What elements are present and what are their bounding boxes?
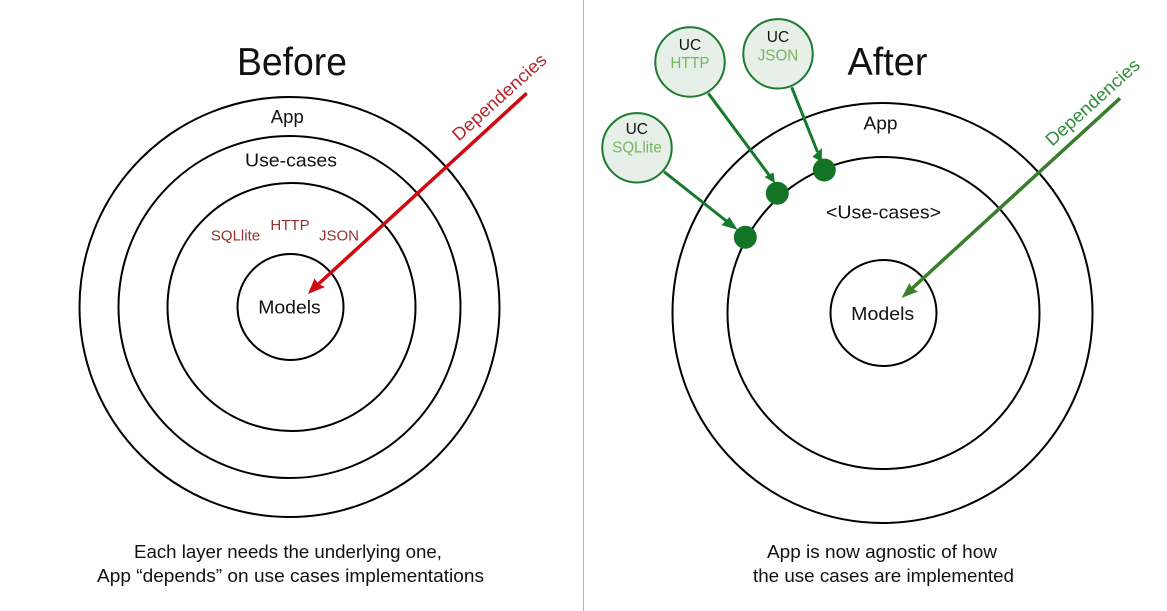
caption: after: the use cases are implemented — [753, 565, 1014, 586]
label: dependencies: Dependencies — [1041, 55, 1144, 150]
node: UC SQLlite: UC — [626, 121, 648, 138]
label: HTTP: HTTP — [270, 217, 310, 234]
node: UC JSON — [743, 19, 813, 88]
label: dependencies: Dependencies — [448, 50, 551, 145]
arrow: dependencies — [902, 98, 1120, 298]
node: UC HTTP — [655, 27, 725, 97]
port: SQLlite — [734, 226, 757, 249]
panel: after — [602, 19, 1144, 586]
heading: before: Before — [237, 41, 347, 84]
arrow: SQLlite to port — [664, 172, 738, 230]
caption: before: Each layer needs the underlying one, — [134, 541, 442, 562]
label: JSON: JSON — [319, 228, 359, 245]
node: UC HTTP: UC — [679, 37, 701, 54]
label: App: App — [271, 106, 304, 127]
label: Models: Models — [851, 303, 914, 324]
caption: before: App “depends” on use cases implementations — [97, 565, 484, 586]
arrow: HTTP to port — [708, 93, 775, 183]
diagram: after circles — [672, 103, 1092, 523]
diagram: before circles — [80, 97, 500, 517]
heading: after: After — [848, 41, 928, 84]
caption: before — [97, 541, 484, 586]
port: JSON — [813, 158, 836, 182]
node: UC SQLlite — [602, 113, 672, 182]
panel: before — [80, 41, 551, 586]
node: UC HTTP: HTTP — [670, 55, 710, 72]
label: Use-cases: Use-cases — [245, 150, 337, 171]
node: UC SQLlite: SQLlite — [612, 140, 662, 156]
node: UC JSON: JSON — [758, 47, 798, 64]
label: App: App — [864, 112, 898, 133]
label: use-cases: <Use-cases> — [826, 202, 941, 222]
arrow: dependencies — [308, 93, 527, 294]
label: SQLlite: SQLlite — [211, 228, 260, 245]
label: Models: Models — [258, 296, 321, 318]
caption: after: App is now agnostic of how — [767, 541, 998, 562]
port: HTTP — [766, 182, 789, 205]
node: UC JSON: UC — [767, 29, 789, 46]
caption: after — [753, 541, 1014, 586]
arrow: JSON to port — [792, 87, 822, 162]
